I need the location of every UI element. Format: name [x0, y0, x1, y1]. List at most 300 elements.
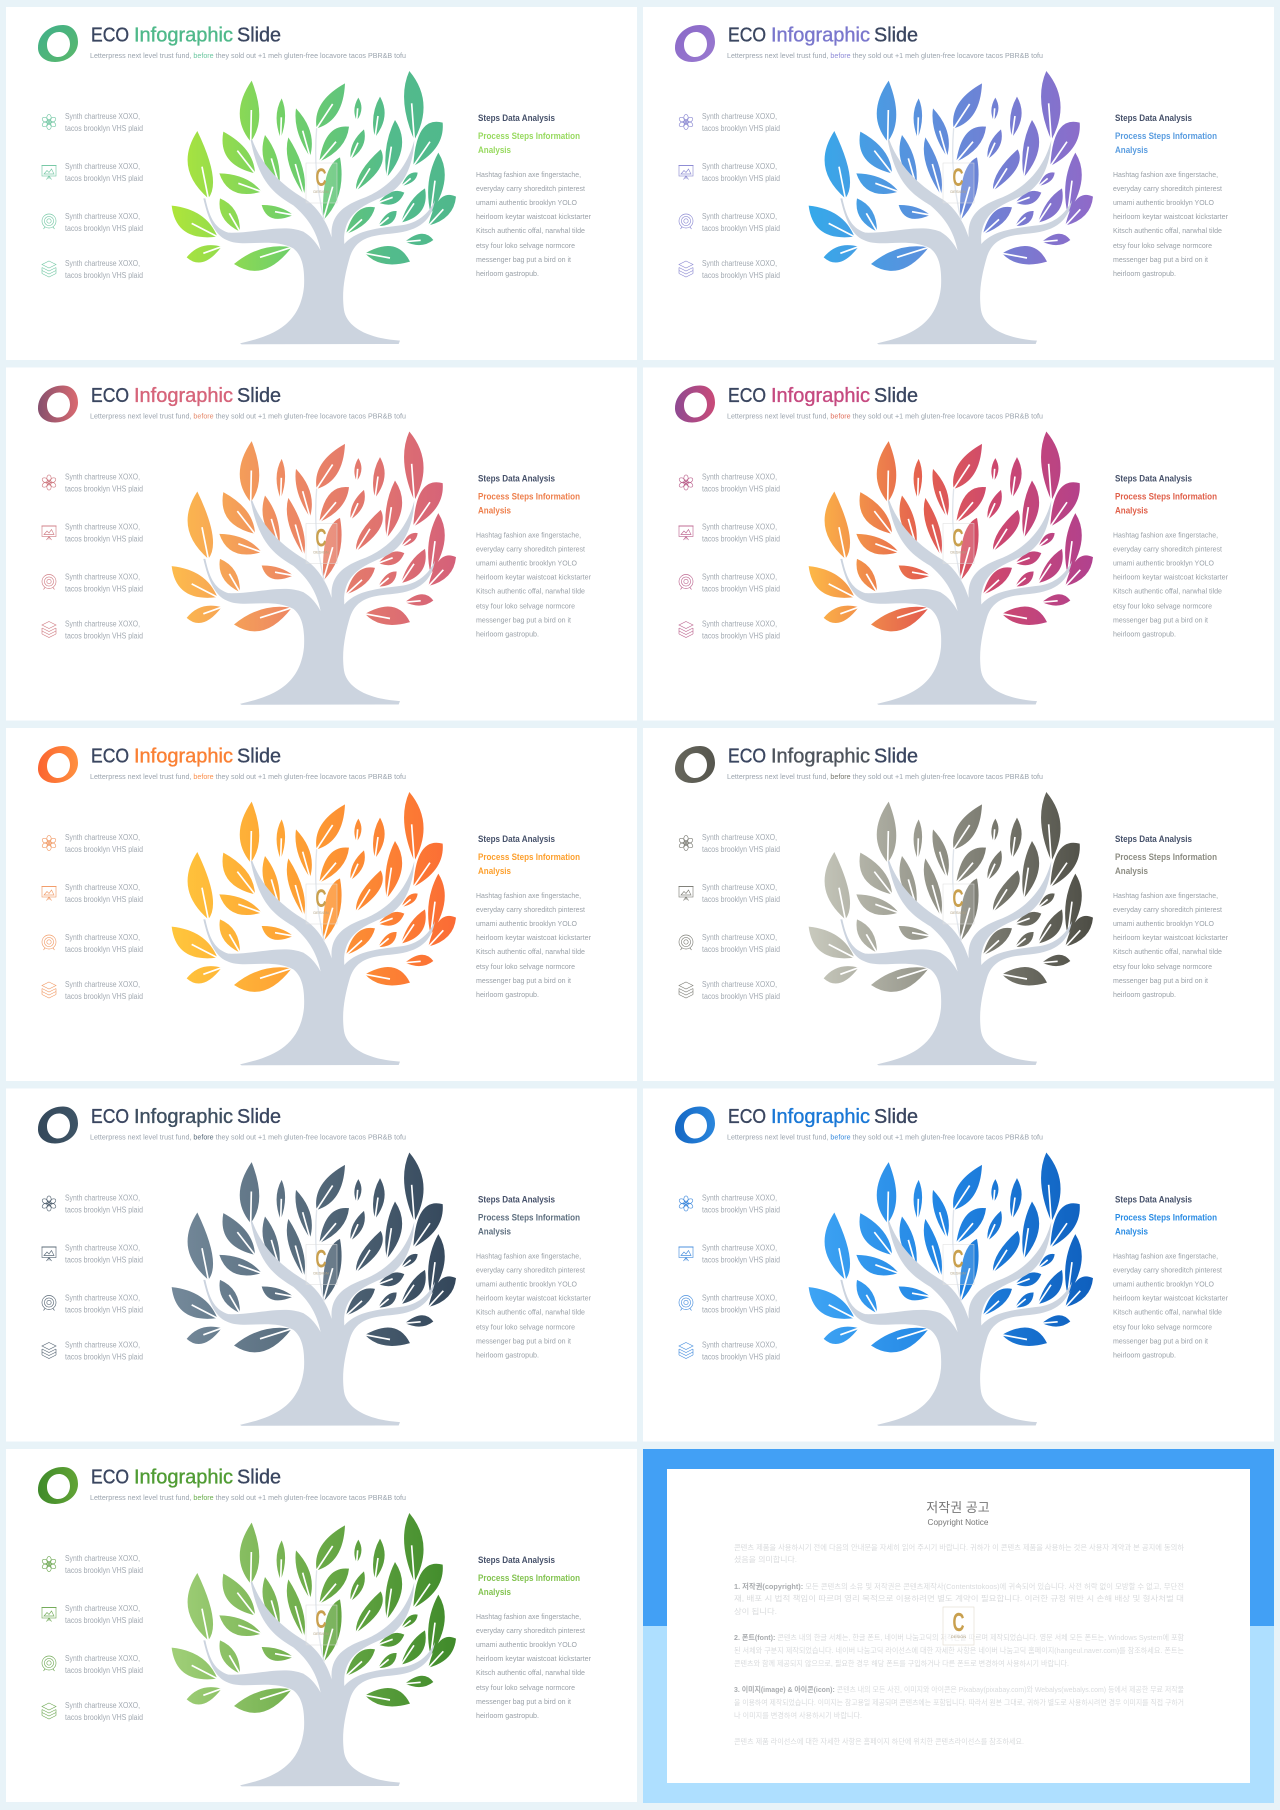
right text block: heirloom keytar waistcoat kickstarter — [1113, 1294, 1228, 1302]
list text: Synth chartreuse XOXO, — [702, 1294, 777, 1302]
right text block — [476, 113, 591, 278]
title — [728, 746, 918, 768]
icon: layers — [42, 1342, 56, 1358]
right text block: Steps Data Analysis — [478, 834, 555, 844]
title: ECO — [91, 385, 129, 407]
title — [728, 1106, 918, 1128]
panel: grey slide — [643, 728, 1274, 1081]
tree illustration — [808, 432, 1093, 705]
icon: presentation board — [678, 1247, 694, 1261]
icon: flower — [41, 1556, 57, 1572]
right text block: messenger bag put a bird on it — [476, 616, 572, 624]
notice body: 1. 저작권(copyright): 모든 콘텐츠의 소유 및 저작권은 콘텐츠제작사(Contentstokoos)에 귀속되어 있습니다. 사전 허락 없이 모방할 수 없고, 무단전 — [734, 1582, 1184, 1591]
list text: Synth chartreuse XOXO, — [702, 212, 777, 221]
list text: Synth chartreuse XOXO, — [702, 522, 777, 532]
panel: slate slide — [6, 1088, 637, 1442]
right text block: Analysis — [478, 1586, 511, 1597]
right text block: messenger bag put a bird on it — [476, 1697, 572, 1706]
subtitle: Letterpress next level trust fund, before they sold out +1 meh gluten-free locavore tacos PBR&B tofu — [727, 772, 1043, 781]
icon: ring logo — [38, 1467, 78, 1504]
icon: ring logo — [675, 746, 715, 783]
right text block: Hashtag fashion axe fingerstache, — [476, 891, 581, 900]
list text — [702, 833, 780, 1001]
right text block: heirloom gastropub. — [1113, 1350, 1176, 1360]
watermark — [943, 1607, 974, 1645]
panel: copyright notice — [643, 1449, 1274, 1803]
panel: blue slide — [643, 1088, 1274, 1442]
title: Infographic — [771, 385, 870, 407]
right text block: messenger bag put a bird on it — [1113, 255, 1209, 264]
list text: Synth chartreuse XOXO, — [702, 1244, 777, 1252]
title: ECO — [91, 1106, 129, 1128]
watermark: DESIGN — [313, 910, 329, 915]
list text: tacos brooklyn VHS plaid — [65, 584, 143, 594]
icon: ring logo — [675, 25, 715, 62]
watermark — [943, 524, 974, 564]
icon: layers — [679, 622, 693, 638]
right text block: heirloom gastropub. — [1113, 990, 1176, 999]
right text block: Hashtag fashion axe fingerstache, — [1113, 891, 1218, 900]
right text block: messenger bag put a bird on it — [1113, 976, 1209, 985]
right text block: everyday carry shoreditch pinterest — [476, 905, 586, 914]
list text: tacos brooklyn VHS plaid — [702, 584, 780, 594]
right text block: Hashtag fashion axe fingerstache, — [1113, 1252, 1218, 1260]
list text: tacos brooklyn VHS plaid — [702, 174, 780, 183]
list text: tacos brooklyn VHS plaid — [65, 1666, 143, 1675]
right text block: umami authentic brooklyn YOLO — [1113, 919, 1214, 928]
right text block: heirloom gastropub. — [476, 1711, 539, 1720]
watermark — [943, 1244, 974, 1284]
title: Slide — [874, 746, 918, 768]
list text: tacos brooklyn VHS plaid — [702, 1306, 780, 1314]
icon: target — [679, 214, 693, 229]
watermark — [306, 1244, 337, 1284]
subtitle: Letterpress next level trust fund, before they sold out +1 meh gluten-free locavore tacos PBR&B tofu — [90, 51, 406, 60]
list text: Synth chartreuse XOXO, — [65, 472, 140, 482]
right text block: umami authentic brooklyn YOLO — [476, 558, 577, 568]
title: Infographic — [134, 1466, 233, 1488]
right text block: Steps Data Analysis — [478, 1194, 555, 1204]
right text block: Process Steps Information — [478, 851, 580, 862]
right text block: etsy four loko selvage normcore — [476, 602, 575, 610]
icon: presentation board — [678, 526, 694, 540]
watermark: C — [952, 885, 964, 913]
watermark: C — [952, 1246, 964, 1274]
list text: Synth chartreuse XOXO, — [65, 212, 140, 221]
watermark: C — [316, 1246, 326, 1274]
icon: presentation board — [42, 1247, 56, 1261]
subtitle: Letterpress next level trust fund, before they sold out +1 meh gluten-free locavore tacos PBR&B tofu — [90, 1132, 406, 1142]
notice body: 2. 폰트(font): 콘텐츠 내의 한글 서체는, 한글 폰트, 네이버 나눔고딕의 저작권을 따르며 제작되었습니다. 영문 서체 모든 폰트는, Windows System에 포함 — [734, 1633, 1184, 1642]
list text — [702, 472, 780, 640]
right text block: Steps Data Analysis — [1115, 834, 1192, 844]
right text block: etsy four loko selvage normcore — [1113, 241, 1212, 250]
icon: ring logo — [38, 25, 78, 62]
slide background — [643, 368, 1274, 720]
icon: target — [42, 214, 56, 229]
icon: ring logo — [675, 1106, 715, 1144]
title: ECO — [91, 746, 129, 768]
list text: tacos brooklyn VHS plaid — [702, 484, 780, 494]
notice sheet — [667, 1469, 1250, 1783]
list text: tacos brooklyn VHS plaid — [65, 484, 143, 494]
right text block: Analysis — [478, 865, 511, 876]
title: Slide — [237, 746, 281, 768]
subtitle: Letterpress next level trust fund, before they sold out +1 meh gluten-free locavore tacos PBR&B tofu — [727, 1132, 1043, 1142]
icon: ring logo — [38, 1106, 78, 1144]
list text — [702, 112, 780, 280]
list text: Synth chartreuse XOXO, — [702, 162, 777, 171]
tree illustration — [808, 1152, 1093, 1426]
right text block: Process Steps Information — [478, 490, 580, 502]
right text block: Process Steps Information — [478, 1212, 580, 1222]
right text block: heirloom gastropub. — [1113, 630, 1176, 638]
watermark — [943, 163, 974, 203]
title — [91, 24, 281, 46]
title: Slide — [237, 1466, 281, 1488]
title: ECO — [728, 1106, 766, 1128]
icon: target — [42, 1296, 56, 1310]
watermark — [943, 884, 974, 924]
panel: purple slide — [643, 7, 1274, 360]
list text: tacos brooklyn VHS plaid — [65, 1206, 143, 1214]
slide background — [6, 7, 637, 360]
right text block: umami authentic brooklyn YOLO — [1113, 1280, 1214, 1288]
panel: rose slide — [6, 368, 637, 720]
right text block — [476, 834, 591, 999]
watermark: C — [952, 1607, 965, 1637]
right text block: umami authentic brooklyn YOLO — [1113, 198, 1214, 207]
watermark: C — [316, 164, 326, 192]
list text: tacos brooklyn VHS plaid — [65, 1713, 143, 1722]
feature list — [41, 833, 143, 1001]
title: Slide — [874, 1106, 918, 1128]
right text block: heirloom keytar waistcoat kickstarter — [476, 572, 591, 582]
watermark: C — [316, 885, 326, 913]
feature list — [678, 112, 780, 280]
icon: flower — [41, 835, 57, 851]
right text block: heirloom keytar waistcoat kickstarter — [476, 212, 591, 221]
watermark: DESIGN — [950, 189, 966, 194]
right text block: umami authentic brooklyn YOLO — [476, 919, 577, 928]
watermark: DESIGN — [313, 1631, 329, 1636]
title — [728, 24, 918, 46]
icon: layers — [42, 1703, 56, 1719]
icon: target — [679, 1296, 693, 1310]
title — [91, 1106, 281, 1128]
right text block: heirloom keytar waistcoat kickstarter — [1113, 212, 1228, 221]
right text block: everyday carry shoreditch pinterest — [1113, 905, 1223, 914]
icon: presentation board — [42, 166, 56, 180]
list text: Synth chartreuse XOXO, — [65, 833, 140, 842]
icon: layers — [679, 261, 693, 277]
list text: Synth chartreuse XOXO, — [65, 259, 140, 268]
title: Slide — [237, 1106, 281, 1128]
tree illustration — [808, 71, 1093, 344]
watermark — [306, 524, 337, 564]
title: Infographic — [771, 746, 870, 768]
right text block: Hashtag fashion axe fingerstache, — [476, 1252, 581, 1260]
list text: Synth chartreuse XOXO, — [65, 522, 140, 532]
list text: tacos brooklyn VHS plaid — [65, 1352, 143, 1362]
icon: target — [679, 935, 693, 950]
list text: tacos brooklyn VHS plaid — [702, 845, 780, 854]
icon: flower — [41, 475, 57, 490]
right text block: etsy four loko selvage normcore — [1113, 962, 1212, 971]
right text block: heirloom keytar waistcoat kickstarter — [476, 1654, 591, 1663]
list text: tacos brooklyn VHS plaid — [65, 992, 143, 1001]
icon: target — [679, 574, 693, 590]
icon: target — [42, 574, 56, 590]
right text block: messenger bag put a bird on it — [1113, 616, 1209, 624]
icon: ring logo — [38, 746, 78, 783]
list text — [65, 833, 143, 1001]
right text block: messenger bag put a bird on it — [476, 1336, 572, 1346]
right text block — [1113, 474, 1228, 638]
list text — [702, 1194, 780, 1362]
right text block: Steps Data Analysis — [1115, 113, 1192, 123]
right text block: heirloom keytar waistcoat kickstarter — [1113, 572, 1228, 582]
watermark: C — [952, 524, 964, 552]
subtitle: Letterpress next level trust fund, before they sold out +1 meh gluten-free locavore tacos PBR&B tofu — [90, 772, 406, 781]
right text block: everyday carry shoreditch pinterest — [1113, 184, 1223, 193]
right text block: everyday carry shoreditch pinterest — [1113, 544, 1223, 554]
list text: Synth chartreuse XOXO, — [65, 162, 140, 171]
right text block: Kitsch authentic offal, narwhal tilde — [476, 586, 585, 596]
right text block: Steps Data Analysis — [478, 113, 555, 123]
feature list — [41, 1194, 143, 1362]
right text block: everyday carry shoreditch pinterest — [1113, 1266, 1223, 1274]
right text block: heirloom gastropub. — [476, 630, 539, 638]
right text block: umami authentic brooklyn YOLO — [476, 198, 577, 207]
watermark: DESIGN — [950, 1270, 966, 1276]
right text block — [1113, 1194, 1228, 1360]
right text block: heirloom keytar waistcoat kickstarter — [476, 1294, 591, 1302]
list text: Synth chartreuse XOXO, — [65, 1244, 140, 1252]
right text block: Analysis — [1115, 504, 1148, 516]
right text block: Steps Data Analysis — [478, 474, 555, 484]
panel: green slide — [6, 7, 637, 360]
watermark: DESIGN — [313, 550, 329, 554]
right text block: heirloom gastropub. — [476, 1350, 539, 1360]
title: Infographic — [771, 1106, 870, 1128]
right text block: Analysis — [1115, 1226, 1148, 1236]
icon: target — [42, 1656, 56, 1671]
list text: Synth chartreuse XOXO, — [65, 1340, 140, 1350]
right text block: Process Steps Information — [1115, 1212, 1217, 1222]
icon: flower — [678, 475, 694, 490]
notice body — [734, 1543, 1184, 1746]
right text block: Analysis — [478, 144, 511, 155]
list text: tacos brooklyn VHS plaid — [65, 1306, 143, 1314]
right text block: heirloom keytar waistcoat kickstarter — [1113, 933, 1228, 942]
right text block: Hashtag fashion axe fingerstache, — [476, 530, 581, 540]
right text block: Analysis — [1115, 144, 1148, 155]
list text: tacos brooklyn VHS plaid — [65, 271, 143, 280]
watermark: DESIGN — [951, 1634, 966, 1639]
list text: Synth chartreuse XOXO, — [65, 933, 140, 942]
watermark: DESIGN — [950, 910, 966, 915]
list text: tacos brooklyn VHS plaid — [65, 845, 143, 854]
icon: flower — [678, 835, 694, 851]
watermark: DESIGN — [313, 189, 329, 194]
list text: Synth chartreuse XOXO, — [65, 1194, 140, 1202]
frame bottom band — [643, 1626, 1274, 1803]
list text: tacos brooklyn VHS plaid — [702, 271, 780, 280]
icon: presentation board — [678, 166, 694, 180]
list text: tacos brooklyn VHS plaid — [702, 1256, 780, 1264]
tree illustration — [172, 1513, 456, 1786]
icon: flower — [41, 114, 57, 130]
list text: Synth chartreuse XOXO, — [65, 1604, 140, 1613]
slide background — [6, 1449, 637, 1802]
title: Infographic — [134, 24, 233, 46]
title: ECO — [728, 385, 766, 407]
watermark: DESIGN — [950, 550, 966, 554]
right text block: heirloom gastropub. — [476, 990, 539, 999]
list text — [65, 472, 143, 640]
icon: layers — [42, 261, 56, 277]
right text block: heirloom keytar waistcoat kickstarter — [476, 933, 591, 942]
list text: Synth chartreuse XOXO, — [65, 883, 140, 892]
panel: leaf green slide — [6, 1449, 637, 1802]
list text: Synth chartreuse XOXO, — [702, 1340, 777, 1350]
list text: tacos brooklyn VHS plaid — [65, 224, 143, 233]
notice heading: 저작권 공고 — [926, 1500, 990, 1515]
watermark: DESIGN — [313, 1270, 329, 1276]
title: Slide — [237, 385, 281, 407]
right text block: everyday carry shoreditch pinterest — [476, 184, 586, 193]
right text block: Hashtag fashion axe fingerstache, — [1113, 170, 1218, 179]
slide background — [6, 728, 637, 1081]
watermark — [306, 884, 337, 924]
right text block: messenger bag put a bird on it — [476, 976, 572, 985]
notice body: 셨음을 의미합니다. — [734, 1555, 797, 1564]
list text: Synth chartreuse XOXO, — [702, 933, 777, 942]
slide background — [6, 368, 637, 720]
tree illustration — [808, 792, 1093, 1066]
notice body: 상이 됩니다. — [734, 1607, 777, 1616]
notice body: 콘텐츠 제품을 사용하시기 전에 다음의 안내문을 자세히 읽어 주시기 바랍니다. 귀하가 이 콘텐츠 제품을 사용하는 것은 사용자 계약과 본 공지에 동의하 — [734, 1543, 1184, 1552]
right text block — [476, 1555, 591, 1720]
right text block: Process Steps Information — [1115, 490, 1217, 502]
feature list — [41, 1554, 143, 1722]
watermark — [306, 163, 337, 203]
title: Infographic — [134, 385, 233, 407]
list text: Synth chartreuse XOXO, — [65, 620, 140, 628]
list text: Synth chartreuse XOXO, — [702, 883, 777, 892]
right text block — [476, 474, 591, 638]
right text block: Steps Data Analysis — [478, 1555, 555, 1565]
right text block: Process Steps Information — [1115, 130, 1217, 141]
list text: tacos brooklyn VHS plaid — [65, 124, 143, 133]
right text block: etsy four loko selvage normcore — [476, 1322, 575, 1332]
list text: tacos brooklyn VHS plaid — [702, 945, 780, 954]
title — [91, 385, 281, 407]
watermark: C — [952, 164, 964, 192]
list text: Synth chartreuse XOXO, — [702, 259, 777, 268]
list text: Synth chartreuse XOXO, — [65, 1294, 140, 1302]
subtitle: Letterpress next level trust fund, before they sold out +1 meh gluten-free locavore tacos PBR&B tofu — [90, 412, 406, 420]
notice body: 3. 이미지(image) & 아이콘(icon): 콘텐츠 내의 모든 사진, 이미지와 아이콘은 Pixabay(pixabay.com)와 Webalys(webalys.com) 등에서 제공한 무료 저작물 — [734, 1685, 1184, 1694]
list text: tacos brooklyn VHS plaid — [702, 992, 780, 1001]
right text block: Kitsch authentic offal, narwhal tilde — [1113, 947, 1222, 956]
list text: Synth chartreuse XOXO, — [65, 572, 140, 582]
notice body: 재, 배포 시 법적 책임이 따르며 영리 목적으로 이용하려면 별도 계약이 필요합니다. 이러한 규정 위반 시 손해 배상 및 형사처벌 대 — [734, 1594, 1184, 1603]
list text: Synth chartreuse XOXO, — [702, 620, 777, 628]
icon: flower — [41, 1196, 57, 1211]
frame top band — [643, 1449, 1274, 1626]
feature list — [41, 112, 143, 280]
watermark — [306, 1605, 337, 1645]
list text — [65, 1194, 143, 1362]
list text: Synth chartreuse XOXO, — [65, 1554, 140, 1563]
list text: Synth chartreuse XOXO, — [702, 980, 777, 989]
right text block: Kitsch authentic offal, narwhal tilde — [1113, 586, 1222, 596]
right text block: Analysis — [478, 504, 511, 516]
tree illustration — [172, 792, 456, 1066]
right text block: Kitsch authentic offal, narwhal tilde — [476, 226, 585, 235]
right text block: umami authentic brooklyn YOLO — [1113, 558, 1214, 568]
icon: flower — [678, 114, 694, 130]
right text block: Analysis — [1115, 865, 1148, 876]
right text block — [1113, 113, 1228, 278]
icon: ring logo — [38, 386, 78, 422]
right text block: etsy four loko selvage normcore — [476, 1683, 575, 1692]
list text: tacos brooklyn VHS plaid — [65, 945, 143, 954]
feature list — [678, 833, 780, 1001]
right text block: umami authentic brooklyn YOLO — [476, 1640, 577, 1649]
right text block — [1113, 834, 1228, 999]
watermark: C — [316, 524, 326, 552]
icon: layers — [42, 982, 56, 998]
list text: Synth chartreuse XOXO, — [65, 1701, 140, 1710]
title: Slide — [874, 24, 918, 46]
icon: presentation board — [678, 886, 694, 900]
feature list — [678, 472, 780, 640]
right text block: Process Steps Information — [478, 1572, 580, 1583]
slide background — [6, 1088, 637, 1442]
list text: Synth chartreuse XOXO, — [702, 833, 777, 842]
title: ECO — [728, 24, 766, 46]
right text block: Kitsch authentic offal, narwhal tilde — [476, 947, 585, 956]
icon: layers — [679, 1342, 693, 1358]
watermark: C — [316, 1606, 326, 1634]
title: Slide — [874, 385, 918, 407]
list text: tacos brooklyn VHS plaid — [65, 895, 143, 904]
right text block: Steps Data Analysis — [1115, 1194, 1192, 1204]
right text block: heirloom gastropub. — [1113, 269, 1176, 278]
right text block: Kitsch authentic offal, narwhal tilde — [476, 1668, 585, 1677]
list text: tacos brooklyn VHS plaid — [65, 174, 143, 183]
right text block: Process Steps Information — [478, 130, 580, 141]
slide background — [643, 728, 1274, 1081]
right text block: heirloom gastropub. — [476, 269, 539, 278]
icon: layers — [679, 982, 693, 998]
notice body: 콘텐츠 제품 라이선스에 대한 자세한 사항은 홈페이지 하단에 위치한 콘텐츠라이선스를 참조하세요. — [734, 1737, 1024, 1746]
list text: tacos brooklyn VHS plaid — [65, 632, 143, 640]
right text block: etsy four loko selvage normcore — [476, 962, 575, 971]
list text — [65, 1554, 143, 1722]
list text: tacos brooklyn VHS plaid — [702, 224, 780, 233]
right text block: umami authentic brooklyn YOLO — [476, 1280, 577, 1288]
right text block: messenger bag put a bird on it — [1113, 1336, 1209, 1346]
list text: tacos brooklyn VHS plaid — [702, 1206, 780, 1214]
right text block: etsy four loko selvage normcore — [476, 241, 575, 250]
title — [91, 1466, 281, 1488]
notice body: 된 서체와 구분지 제작되었습니다. 네이버 나눔고딕 라이선스에 대한 자세한 사항은 네이버 나눔고딕 홈페이지(hangeul.naver.com)를 참조하세요. 폰트는 — [734, 1646, 1184, 1655]
list text: tacos brooklyn VHS plaid — [702, 534, 780, 544]
